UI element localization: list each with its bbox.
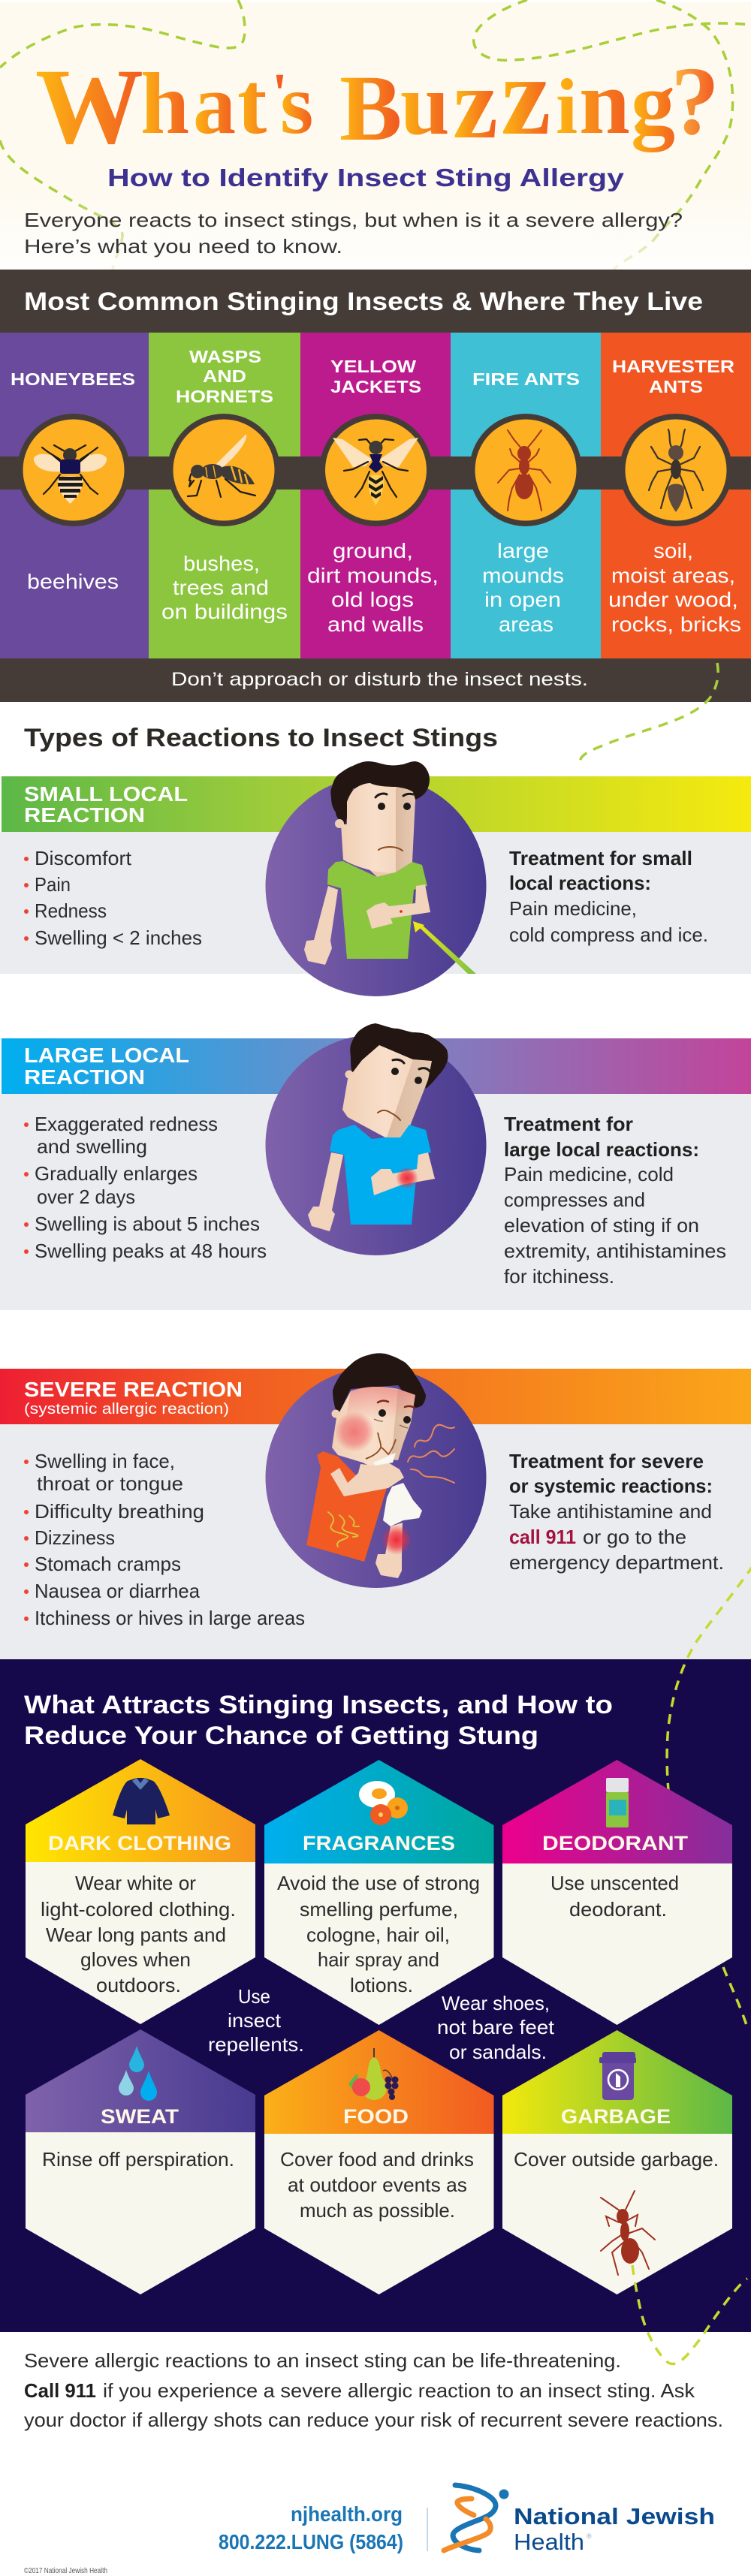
logo: National Jewish Health: Health xyxy=(514,2529,584,2555)
column: fire ants: areas xyxy=(499,613,553,636)
symptom list: Redness xyxy=(35,899,107,922)
icon: wasp xyxy=(188,434,255,497)
column: yellow jackets xyxy=(307,357,439,636)
hexagon: dark clothing: gloves when xyxy=(80,1948,191,1971)
symptom list: Exaggerated redness xyxy=(35,1113,218,1135)
column: honeybees xyxy=(11,369,135,593)
treatment text: emergency department. xyxy=(509,1551,724,1574)
arrow: to sting xyxy=(413,921,476,974)
person with severe reaction xyxy=(266,1353,487,1588)
title: ? xyxy=(671,47,719,155)
symptom list xyxy=(24,1113,267,1262)
treatment text xyxy=(509,1450,724,1574)
callout: use insect repellents: Use xyxy=(238,1985,270,2008)
icon: red ant xyxy=(601,2191,655,2275)
treatment text: elevation of sting if on xyxy=(504,1214,699,1237)
column: wasps and hornets xyxy=(161,347,288,623)
hexagon: fragrances: cologne, hair oil, xyxy=(306,1924,450,1946)
band heading: SEVERE REACTION xyxy=(24,1378,243,1401)
dashed insect flight paths at top xyxy=(0,0,751,270)
band heading: REACTION xyxy=(24,1065,145,1089)
hexagon: fragrances: Avoid the use of strong xyxy=(277,1872,480,1894)
symptom list: Swelling is about 5 inches xyxy=(35,1213,260,1235)
symptom list: Stomach cramps xyxy=(35,1553,181,1575)
contact info: 800.222.LUNG (5864) xyxy=(219,2530,403,2553)
panel: large local reaction xyxy=(0,1023,751,1310)
title: z xyxy=(453,48,498,160)
band heading xyxy=(24,782,188,827)
heading: what attracts xyxy=(24,1691,613,1750)
heading: types of reactions: Types of Reactions to Insect Stings xyxy=(24,724,498,752)
icon: deodorant can xyxy=(606,1778,629,1827)
icon: trash can xyxy=(599,2052,636,2100)
column: wasps and hornets: AND xyxy=(203,366,246,386)
column: wasps and hornets: trees and xyxy=(173,576,269,599)
hexagon: dark clothing: DARK CLOTHING xyxy=(48,1832,231,1854)
panel: most common stinging insects xyxy=(0,270,751,702)
subtitle: How to Identify Insect Sting Allergy xyxy=(107,164,625,191)
column: fire ants: in open xyxy=(484,588,561,611)
intro text xyxy=(24,209,683,258)
hexagon: fragrances: smelling perfume, xyxy=(300,1898,458,1921)
header background xyxy=(0,2,751,270)
hexagon: garbage: Cover outside garbage. xyxy=(514,2148,719,2171)
symptom list: Swelling in face, xyxy=(35,1450,175,1472)
column: wasps and hornets: bushes, xyxy=(183,552,260,575)
column: yellow jackets: dirt mounds, xyxy=(307,564,439,587)
title: a xyxy=(193,56,236,152)
column: fire ants: large xyxy=(497,539,549,562)
band heading xyxy=(24,1044,189,1089)
column: harvester ants xyxy=(608,357,741,636)
panel: small local reaction xyxy=(0,761,751,996)
hexagon: dark clothing: Wear long pants and xyxy=(46,1924,226,1946)
treatment text: for itchiness. xyxy=(504,1265,614,1288)
title: u xyxy=(400,55,450,153)
treatment text: Treatment for xyxy=(504,1113,633,1135)
hexagon: food xyxy=(264,2030,494,2294)
hexagon: fragrances: lotions. xyxy=(350,1974,413,1996)
icon: flowers xyxy=(359,1781,408,1825)
symptom list: Dizziness xyxy=(35,1526,115,1549)
panel: what attracts insects xyxy=(0,1565,751,2332)
symptom list: Swelling < 2 inches xyxy=(35,926,202,949)
column: fire ants: FIRE ANTS xyxy=(472,369,580,389)
title: n xyxy=(579,52,630,153)
closing text: your doctor if allergy shots can reduce your risk of recurrent severe reactions. xyxy=(24,2409,723,2431)
treatment text: call 911 xyxy=(509,1526,576,1548)
hexagon: dark clothing: light-colored clothing. xyxy=(41,1898,236,1921)
column: fire ants: mounds xyxy=(482,564,564,587)
hexagon: fragrances: FRAGRANCES xyxy=(303,1832,455,1854)
band heading: LARGE LOCAL xyxy=(24,1044,189,1067)
column: harvester ants: moist areas, xyxy=(611,564,735,587)
intro text: Everyone reacts to insect stings, but when is it a severe allergy? xyxy=(24,209,683,231)
closing text: Severe allergic reactions to an insect sting can be life-threatening. xyxy=(24,2349,621,2372)
symptom list: throat or tongue xyxy=(37,1472,183,1495)
column: honeybees: HONEYBEES xyxy=(11,369,135,389)
symptom list: and swelling xyxy=(37,1135,147,1158)
contact info: njhealth.org xyxy=(291,2502,403,2526)
person with small reaction xyxy=(266,761,487,996)
title: z xyxy=(501,34,551,158)
symptom list: over 2 days xyxy=(37,1186,135,1208)
treatment text: Pain medicine, xyxy=(509,897,637,920)
icon: shirt xyxy=(113,1778,170,1824)
callout: nest warning: Don’t approach or disturb the insect nests. xyxy=(171,669,588,690)
heading: what attracts: What Attracts Stinging Insects, and How to xyxy=(24,1691,613,1719)
copyright: ©2017 National Jewish Health xyxy=(24,2567,107,2575)
hexagon: food: FOOD xyxy=(343,2105,409,2128)
hexagon: food: much as possible. xyxy=(300,2199,455,2222)
callout: wear shoes: Wear shoes, xyxy=(442,1992,550,2014)
column: yellow jackets: and walls xyxy=(327,613,424,636)
band heading: REACTION xyxy=(24,803,145,827)
dashed path re-entering xyxy=(723,1967,747,2027)
title: s xyxy=(280,56,335,152)
hexagon: food: at outdoor events as xyxy=(288,2174,467,2196)
band heading xyxy=(24,1378,243,1418)
symptom list: Gradually enlarges xyxy=(35,1162,198,1185)
callout: use insect repellents: repellents. xyxy=(208,2033,304,2056)
dashed path at bottom xyxy=(632,2265,747,2364)
treatment text: local reactions: xyxy=(509,872,651,894)
symptom list xyxy=(24,1450,305,1629)
hexagon: deodorant xyxy=(502,1760,732,2025)
column: wasps and hornets: WASPS xyxy=(189,347,261,366)
column: harvester ants: rocks, bricks xyxy=(611,613,741,636)
treatment text: compresses and xyxy=(504,1189,645,1211)
callout: use insect repellents: insect xyxy=(228,2009,282,2032)
hexagon: deodorant: DEODORANT xyxy=(542,1832,689,1854)
closing text: if you experience a severe allergic reaction to an insect sting. Ask xyxy=(103,2379,695,2402)
hexagon: food: Cover food and drinks xyxy=(280,2148,474,2171)
title: ' xyxy=(272,62,288,125)
column: wasps and hornets: HORNETS xyxy=(176,387,273,406)
title: i xyxy=(556,62,578,150)
hexagon: fragrances: hair spray and xyxy=(318,1948,439,1971)
treatment text xyxy=(504,1113,726,1288)
logo: National Jewish Health: National Jewish xyxy=(514,2503,715,2529)
hexagon: dark clothing: Wear white or xyxy=(75,1872,196,1894)
icon: fire ant xyxy=(498,430,550,511)
hexagon: deodorant: deodorant. xyxy=(569,1898,667,1921)
callout: wear shoes xyxy=(437,1992,555,2063)
logo: National Jewish Health xyxy=(444,2485,715,2555)
treatment text: Take antihistamine and xyxy=(509,1500,712,1523)
symptom list: Discomfort xyxy=(35,847,132,869)
treatment text xyxy=(509,847,708,946)
callout: wear shoes: or sandals. xyxy=(449,2041,547,2063)
column: yellow jackets: ground, xyxy=(333,539,413,562)
column: yellow jackets: old logs xyxy=(331,588,414,611)
hexagon: sweat: SWEAT xyxy=(101,2105,179,2128)
column: harvester ants: HARVESTER xyxy=(612,357,734,376)
symptom list: Nausea or diarrhea xyxy=(35,1580,201,1602)
column: harvester ants: soil, xyxy=(653,539,693,562)
band heading: SMALL LOCAL xyxy=(24,782,188,806)
callout: use insect repellents xyxy=(208,1985,304,2056)
treatment text: cold compress and ice. xyxy=(509,923,708,946)
symptom list: Itchiness or hives in large areas xyxy=(35,1607,305,1629)
hexagon: dark clothing: outdoors. xyxy=(96,1974,181,1996)
icon: honeybee xyxy=(34,445,107,504)
title: t xyxy=(237,54,267,152)
icon: harvester ant xyxy=(649,429,703,512)
panel: severe reaction xyxy=(0,1353,751,1659)
column: honeybees: beehives xyxy=(27,570,119,593)
hexagon: garbage: GARBAGE xyxy=(561,2105,671,2128)
symptom squiggles xyxy=(328,1425,454,1547)
hexagon: sweat: Rinse off perspiration. xyxy=(42,2148,234,2171)
hexagon: fragrances xyxy=(264,1760,494,2025)
treatment text: large local reactions: xyxy=(504,1138,699,1161)
logo: National Jewish Health: ® xyxy=(587,2532,592,2540)
treatment text: or go to the xyxy=(583,1526,686,1548)
column: yellow jackets: JACKETS xyxy=(330,377,421,396)
symptom list: Pain xyxy=(35,873,71,896)
column: wasps and hornets: on buildings xyxy=(161,600,288,623)
contact info xyxy=(219,2502,403,2553)
column: yellow jackets: YELLOW xyxy=(330,357,416,376)
column: harvester ants: under wood, xyxy=(608,588,738,611)
hexagon: garbage xyxy=(502,2030,732,2294)
treatment text: Treatment for severe xyxy=(509,1450,704,1472)
person with large reaction xyxy=(266,1023,487,1255)
title: h xyxy=(140,56,189,152)
column: fire ants xyxy=(469,369,582,636)
treatment text: Pain medicine, cold xyxy=(504,1163,674,1186)
dashed path between sections xyxy=(580,663,718,763)
title: W xyxy=(35,47,143,167)
logo mark xyxy=(444,2485,509,2550)
title: B xyxy=(339,57,402,161)
icon: fruit xyxy=(348,2048,398,2100)
intro text: Here’s what you need to know. xyxy=(24,235,342,258)
symptom list: Difficulty breathing xyxy=(35,1500,204,1523)
treatment text: Treatment for small xyxy=(509,847,692,869)
treatment text: or systemic reactions: xyxy=(509,1475,713,1497)
symptom list: Swelling peaks at 48 hours xyxy=(35,1240,267,1262)
band heading: (systemic allergic reaction) xyxy=(24,1401,229,1418)
icon: yellow jacket xyxy=(333,438,418,505)
closing text: Call 911 xyxy=(24,2379,96,2402)
title: g xyxy=(631,54,675,152)
closing text xyxy=(24,2349,723,2431)
hexagon: sweat xyxy=(26,2029,255,2294)
heading: most common insects: Most Common Stinging Insects & Where They Live xyxy=(24,288,703,316)
dashed path through panel xyxy=(667,1565,751,1791)
heading: what attracts: Reduce Your Chance of Getting Stung xyxy=(24,1722,538,1750)
hexagon: deodorant: Use unscented xyxy=(550,1872,679,1894)
column: harvester ants: ANTS xyxy=(649,377,703,396)
callout: wear shoes: not bare feet xyxy=(437,2016,555,2038)
icon: sweat drops xyxy=(119,2046,157,2101)
treatment text: extremity, antihistamines xyxy=(504,1240,726,1262)
hexagon: dark clothing xyxy=(26,1759,255,2024)
symptom list xyxy=(24,847,202,949)
